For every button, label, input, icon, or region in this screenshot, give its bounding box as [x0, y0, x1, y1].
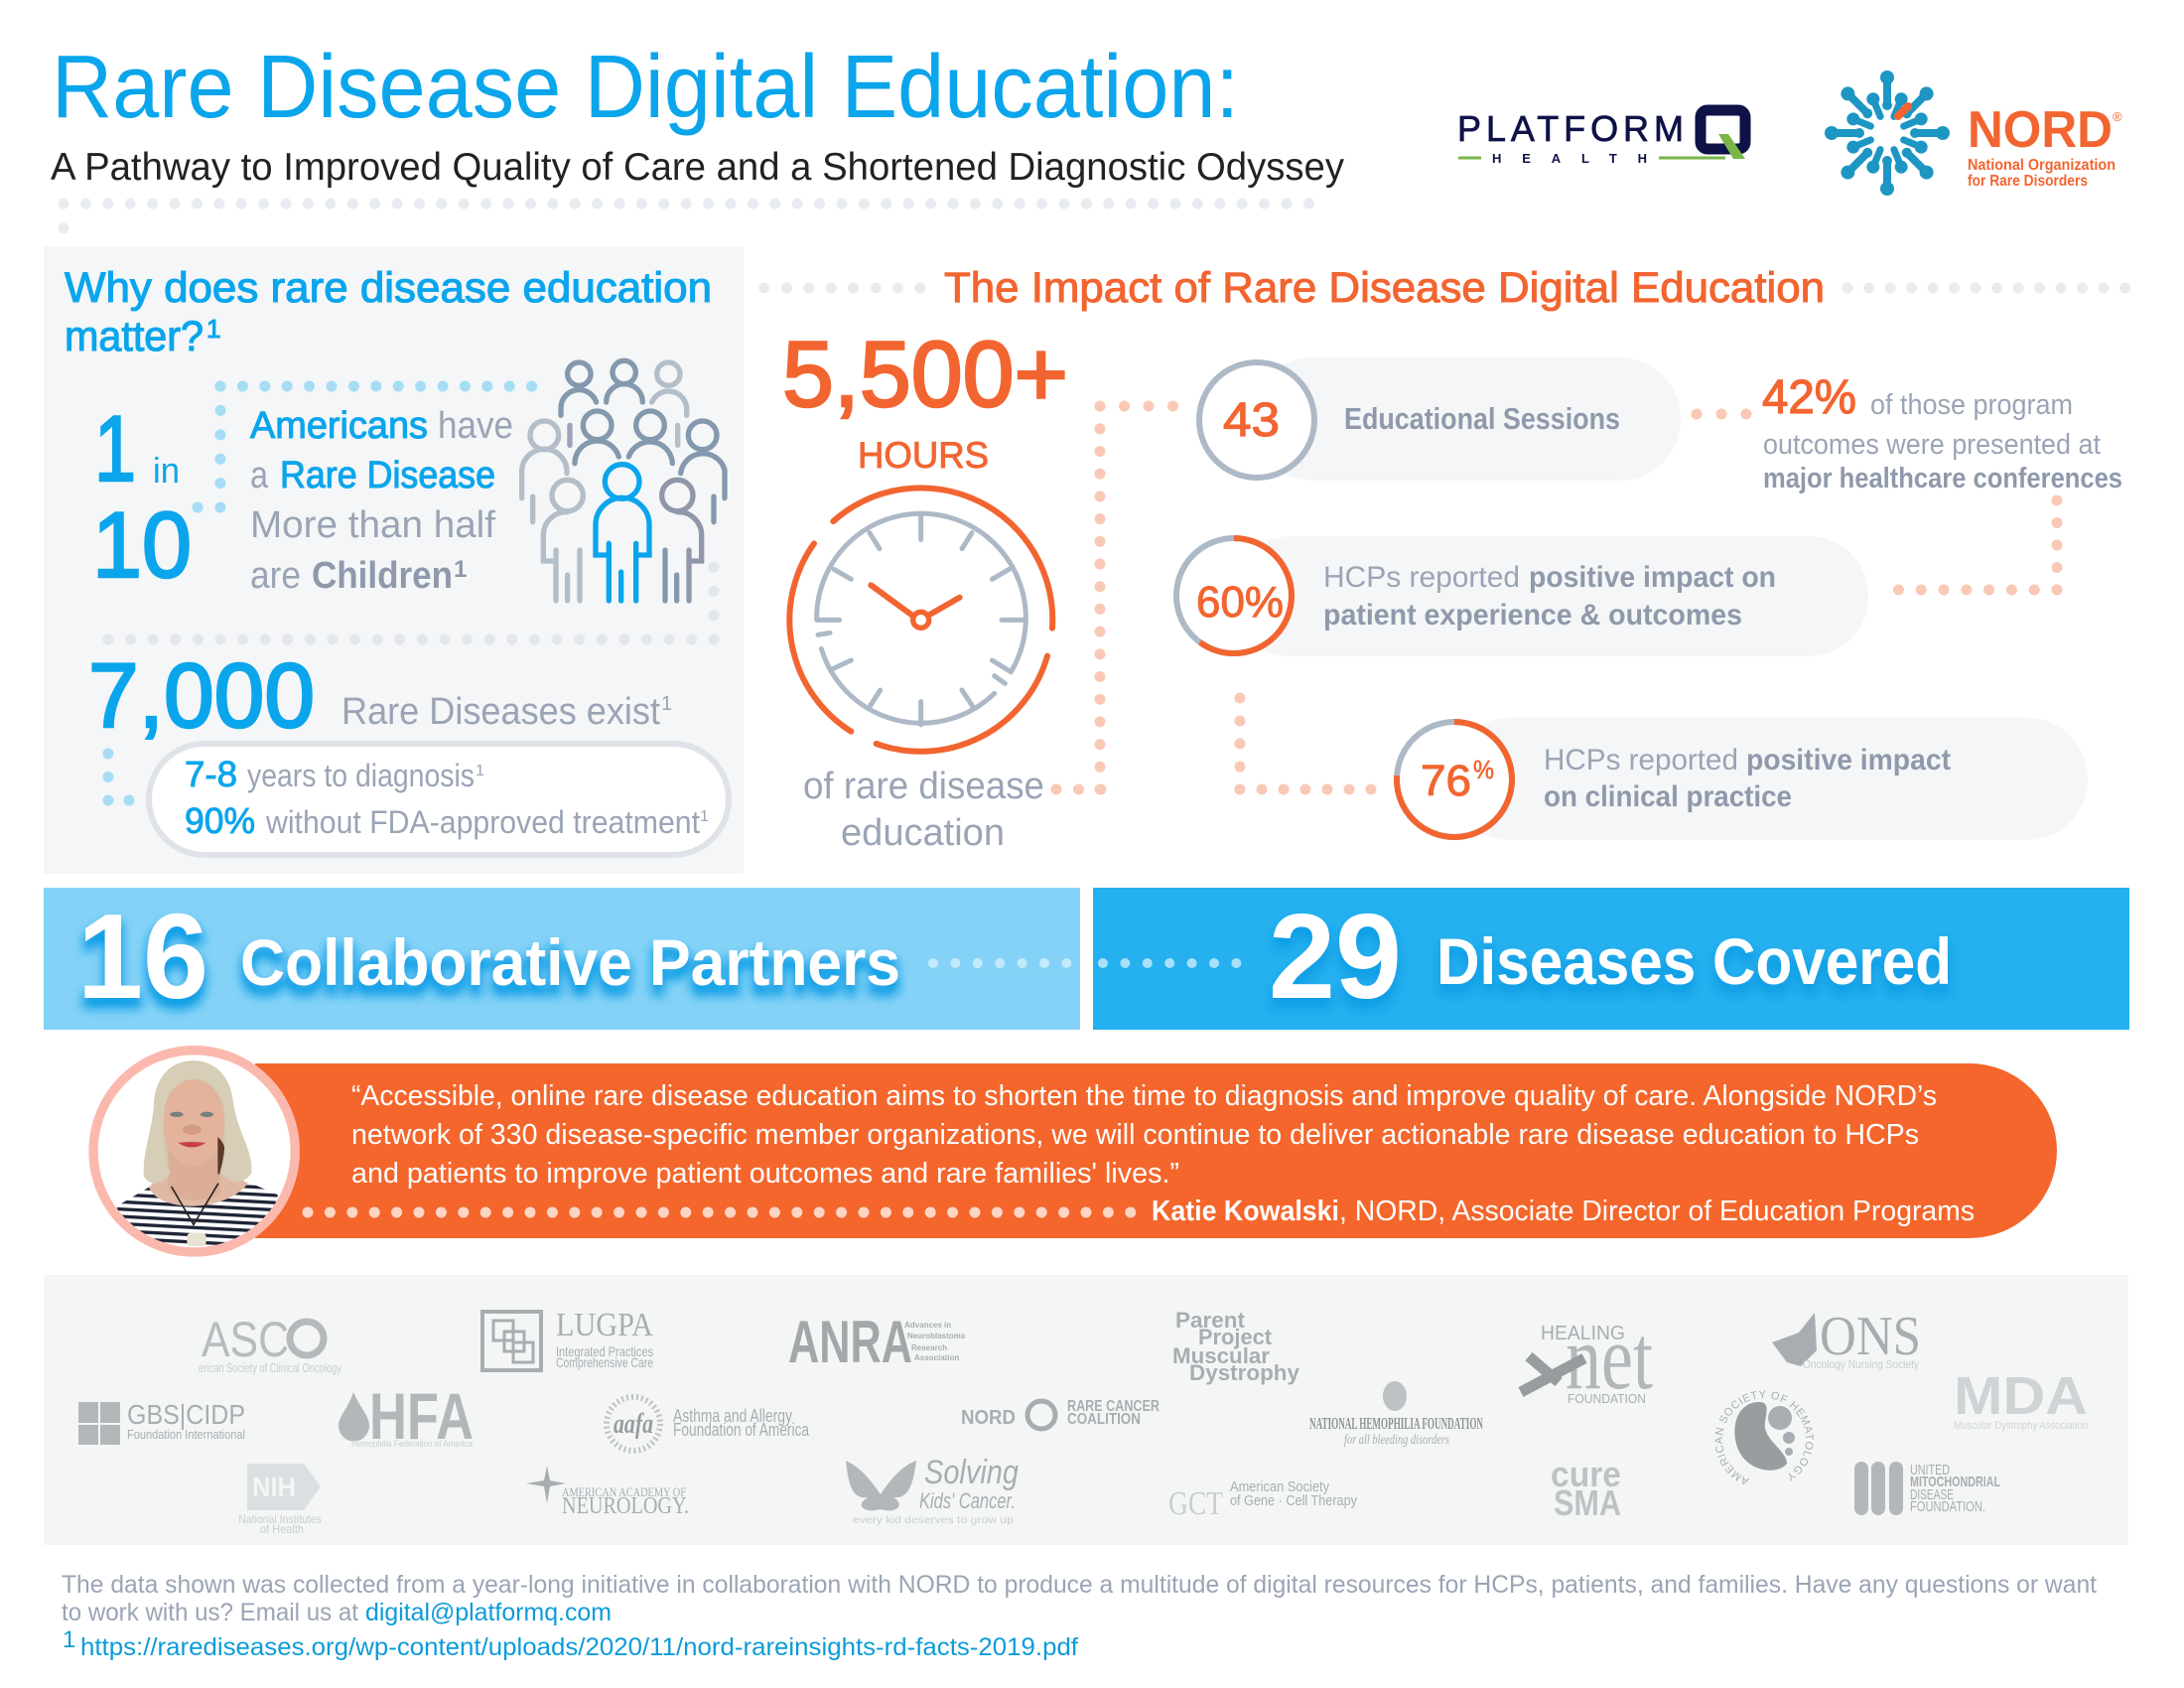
panel heading: Why does rare disease education [65, 264, 712, 312]
title: Rare Disease Digital Education: [52, 38, 1239, 137]
stat pill: 76% clinical practice: HCPs reported [1544, 744, 1738, 776]
logo: NORD Rare Cancer Coalition: COALITION [1067, 1411, 1141, 1428]
footer text: The data shown was collected from a year-long initiative in collaboration with NORD to produce a multitude of digital resources for HCPs, patients, and families. Have any questions or want [62, 1571, 2097, 1599]
text: of rare disease education: education [841, 812, 1005, 854]
logo: GBS CIDP: GBS|CIDP [127, 1399, 245, 1430]
logo: Parent Project Muscular Dystrophy [1172, 1308, 1300, 1385]
logo: GBS CIDP: Foundation International [127, 1427, 245, 1442]
banner: 29 diseases covered [1093, 888, 2129, 1030]
stat: 5,500+ hours: HOURS [858, 435, 989, 476]
text: Americans have a rare disease: are [250, 555, 301, 597]
logo: NORD Rare Cancer Coalition: NORD [961, 1407, 1016, 1429]
logo: Cure SMA [1551, 1454, 1621, 1523]
logo: Parent Project Muscular Dystrophy: Project [1198, 1325, 1273, 1349]
logo: LUGPA: Integrated Practices [556, 1343, 653, 1359]
logo: HFA [339, 1379, 474, 1453]
callout: diagnosis and treatment stats: 7-8 [185, 754, 237, 794]
stat pill: 76% clinical practice: 76 [1421, 757, 1471, 805]
logo: National Hemophilia Foundation [1309, 1381, 1483, 1448]
stat: 1 in 10: 1 [94, 396, 136, 500]
callout: diagnosis and treatment stats: 90% [185, 800, 255, 841]
logo: ANRA: ANRA [788, 1309, 912, 1375]
stat: 7,000 rare diseases: Rare Diseases exist [341, 691, 660, 733]
banner: 16 collaborative partners: 16 [77, 889, 208, 1024]
stat: 7,000 rare diseases [88, 645, 672, 747]
quote text: “Accessible, online rare disease education aims to shorten the time to diagnosis and improve quality of care. Alongside NORD’s [351, 1080, 1937, 1112]
logo: Healing NET Foundation: net [1566, 1307, 1653, 1408]
logo: ONS: Oncology Nursing Society [1803, 1357, 1919, 1371]
logo: LUGPA [482, 1307, 653, 1370]
logo: Healing NET Foundation [1521, 1307, 1653, 1408]
stat pill: 60% patient experience: 60% [1196, 578, 1284, 627]
stat: 42% conferences: of those program [1870, 389, 2073, 421]
banner: 16 collaborative partners: Collaborative Partners [240, 925, 900, 999]
stat pill: 43 educational sessions: Educational Sessions [1344, 401, 1620, 436]
logo: Solving Kids' Cancer [846, 1454, 1019, 1526]
logo: American Society of Gene and Cell Therapy [1168, 1478, 1357, 1522]
logo: GBS CIDP [78, 1399, 245, 1445]
stat: 1 in 10: 10 [92, 492, 192, 597]
logo: HFA: Hemophilia Federation of America [351, 1439, 473, 1449]
text: Americans have a rare disease: have [438, 405, 513, 447]
panel heading: 1 [206, 314, 220, 344]
text: of rare disease education: of rare disease [803, 766, 1044, 807]
subtitle: A Pathway to Improved Quality of Care and a Shortened Diagnostic Odyssey [51, 146, 1344, 189]
stat: 42% conferences: major healthcare conferences [1763, 463, 2122, 494]
logo: Healing NET Foundation: FOUNDATION [1568, 1391, 1646, 1406]
logo: MDA: MDA [1954, 1366, 2088, 1426]
banner: 29 diseases covered: 29 [1269, 889, 1402, 1024]
logo: ASCO: erican Society of Clinical Oncology [199, 1360, 341, 1375]
logo: NIH: NIH [252, 1472, 296, 1502]
logo: Parent Project Muscular Dystrophy: Parent [1175, 1308, 1246, 1333]
footer text [62, 1571, 2097, 1661]
stat: 1 in 10 [92, 396, 192, 597]
logo: American Society of Hematology: AMERICAN SOCIETY OF HEMATOLOGY [1715, 1390, 1814, 1484]
stat pill: 76% clinical practice: on clinical practice [1544, 780, 1792, 813]
photo: Katie Kowalski [93, 1051, 295, 1263]
text: Americans have a rare disease: More than half [250, 504, 495, 546]
logo: AAFA: Foundation of America [673, 1420, 810, 1440]
text: Americans have a rare disease: 1 [454, 556, 467, 583]
banner: 16 collaborative partners [44, 888, 1080, 1030]
logo: NORD: ® [2113, 109, 2122, 124]
logo: NORD: NORD [1968, 101, 2113, 159]
logo: PlatformQ Health [1457, 108, 1745, 166]
callout: diagnosis and treatment stats: years to diagnosis [247, 758, 475, 793]
panel: partner logos [44, 1275, 2128, 1545]
icon: clock [789, 488, 1052, 752]
logo: Parent Project Muscular Dystrophy: Dystrophy [1189, 1360, 1300, 1385]
stat: 5,500+ hours [782, 322, 1068, 476]
logo: American Academy of Neurology [526, 1466, 689, 1519]
logo: MDA: Muscular Dystrophy Association [1954, 1420, 2088, 1432]
stat pill: 76% clinical practice: % [1473, 755, 1494, 784]
logo: ANRA: Advances in [904, 1321, 951, 1330]
logo: United Mitochondrial Disease Foundation [1854, 1462, 2000, 1515]
logo: United Mitochondrial Disease Foundation: FOUNDATION. [1910, 1498, 1985, 1515]
text: Americans have a rare disease: Americans [250, 405, 428, 447]
logo: National Hemophilia Foundation: NATIONAL HEMOPHILIA FOUNDATION [1309, 1414, 1483, 1433]
quote text: , NORD, Associate Director of Education Programs [1339, 1196, 1975, 1227]
callout: diagnosis and treatment stats: without FDA-approved treatment [265, 804, 700, 840]
heading: the impact: The Impact of Rare Disease Digital Education [944, 264, 1825, 312]
logo: ONS [1772, 1306, 1921, 1371]
logo: NORD Rare Cancer Coalition [961, 1398, 1160, 1429]
logo: Cure SMA: cure [1551, 1454, 1621, 1494]
banner: 29 diseases covered: Diseases Covered [1436, 924, 1952, 998]
footer text: 1 [63, 1626, 75, 1653]
logo: PlatformQ Health: HEALTH [1492, 151, 1647, 166]
stat pill: 43 educational sessions: 43 [1223, 394, 1280, 447]
stat pill: 76% clinical practice: positive impact [1746, 744, 1951, 776]
text: Americans have a rare disease: Children [312, 555, 453, 597]
text: Americans have a rare disease: Rare Disease [280, 455, 495, 496]
logo: Solving Kids' Cancer: every kid deserves to grow up [853, 1515, 1015, 1526]
callout: diagnosis and treatment stats: 1 [476, 763, 484, 779]
footer text: digital@platformq.com [365, 1599, 612, 1626]
footer text: https://rarediseases.org/wp-content/uploads/2020/11/nord-rareinsights-rd-facts-2019.pdf [80, 1633, 1078, 1661]
logo: American Academy of Neurology: AMERICAN ACADEMY OF [562, 1484, 686, 1499]
logo: American Society of Gene and Cell Therapy: American Society [1230, 1478, 1329, 1495]
text: of rare disease education [803, 766, 1044, 854]
stat pill: 43 educational sessions [1199, 357, 1681, 481]
stat: 1 in 10: in [153, 450, 180, 491]
logo: LUGPA: LUGPA [556, 1307, 653, 1343]
icon: crowd of people [522, 360, 725, 601]
logo: AAFA [607, 1397, 810, 1451]
footer text: to work with us? Email us at [62, 1599, 358, 1626]
logo: National Hemophilia Foundation: for all bleeding disorders [1344, 1433, 1449, 1448]
logo: ASCO [199, 1312, 341, 1375]
logo: ANRA: Association [914, 1353, 959, 1362]
stat: 7,000 rare diseases: 1 [661, 693, 672, 715]
logo: Healing NET Foundation: HEALING [1541, 1323, 1625, 1344]
stat: 5,500+ hours: 5,500+ [782, 322, 1068, 426]
quote text: Katie Kowalski [1152, 1196, 1339, 1227]
logo: Solving Kids' Cancer: Solving [924, 1454, 1019, 1491]
logo: NORD Rare Cancer Coalition: RARE CANCER [1067, 1398, 1160, 1415]
logo: AAFA: Asthma and Allergy [673, 1406, 792, 1426]
stat: 7,000 rare diseases: 7,000 [88, 645, 315, 747]
stat pill: 60% patient experience: HCPs reported [1323, 561, 1520, 594]
logo: AAFA: aafa [614, 1409, 653, 1440]
logo: NIH [238, 1464, 322, 1536]
logo: Cure SMA: SMA [1554, 1482, 1621, 1523]
logo: Solving Kids' Cancer: Kids' Cancer. [919, 1488, 1016, 1513]
logo: United Mitochondrial Disease Foundation: DISEASE [1910, 1486, 1954, 1503]
logo: ONS: ONS [1820, 1306, 1921, 1367]
callout: diagnosis and treatment stats: 1 [700, 808, 709, 825]
panel heading: matter? [65, 313, 204, 360]
stat: 42% conferences: outcomes were presented at [1763, 429, 2101, 461]
logo: NORD [1825, 70, 2122, 196]
stat pill: 60% patient experience: patient experience & outcomes [1323, 599, 1742, 632]
stat: 42% conferences: 42% [1762, 371, 1856, 424]
logo: ANRA: Neuroblastoma [907, 1332, 966, 1340]
logo: Parent Project Muscular Dystrophy: Muscular [1172, 1343, 1270, 1368]
logo: PlatformQ Health: PLATFORM [1457, 108, 1684, 149]
logo: NORD: National Organization [1968, 157, 2116, 174]
quote panel [255, 1063, 2057, 1238]
stat pill: 60% patient experience: positive impact on [1529, 561, 1776, 594]
logo: NORD: for Rare Disorders [1968, 173, 2088, 190]
callout: diagnosis and treatment stats [149, 744, 729, 855]
quote text [351, 1080, 1975, 1227]
quote text: and patients to improve patient outcomes and rare families' lives.” [351, 1158, 1179, 1190]
text: Americans have a rare disease [250, 405, 513, 597]
panel: why does rare disease education matter [44, 246, 744, 874]
logo: ANRA: Research [911, 1343, 947, 1352]
logo: United Mitochondrial Disease Foundation: UNITED [1910, 1462, 1950, 1478]
logo: LUGPA: Comprehensive Care [556, 1354, 653, 1370]
logo: HFA: HFA [369, 1379, 474, 1453]
logo: American Academy of Neurology: NEUROLOGY. [562, 1493, 689, 1519]
stat pill: 76% clinical practice [1397, 718, 2088, 840]
logo: ASCO: ASC [202, 1312, 289, 1367]
logo: NIH: National Institutes [238, 1512, 322, 1526]
stat: 42% conferences [1762, 371, 2122, 494]
text: Americans have a rare disease: a [250, 455, 269, 496]
quote text: network of 330 disease-specific member organizations, we will continue to deliver actionable rare disease education to HCPs [351, 1119, 1919, 1151]
panel heading [65, 264, 712, 360]
logo: United Mitochondrial Disease Foundation: MITOCHONDRIAL [1910, 1474, 2000, 1490]
logo: American Society of Gene and Cell Therapy: of Gene · Cell Therapy [1230, 1492, 1357, 1509]
stat pill: 60% patient experience [1176, 536, 1868, 656]
logo: American Society of Gene and Cell Therapy: GCT [1168, 1485, 1223, 1522]
logo: NIH: of Health [260, 1522, 304, 1536]
